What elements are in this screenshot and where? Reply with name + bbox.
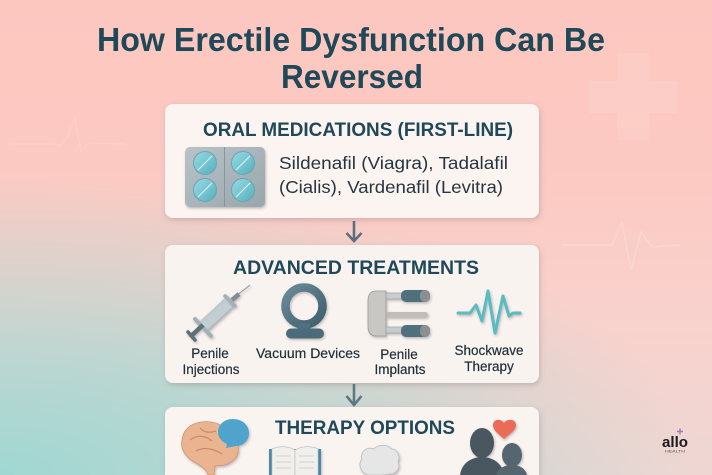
heading: oral medications: ORAL MEDICATIONS (FIRST-LINE) xyxy=(203,120,513,141)
icon: shockwave xyxy=(458,291,520,333)
icon: blister pack xyxy=(185,147,265,207)
arrow: oral medications to advanced treatments xyxy=(346,221,362,241)
label: shockwave therapy: Shockwave xyxy=(454,343,524,358)
heading: advanced treatments: ADVANCED TREATMENTS xyxy=(233,258,479,279)
background decoration: heartbeat line right xyxy=(562,223,680,270)
title: How Erectile Dysfunction Can Be xyxy=(97,21,605,58)
arrow: advanced treatments to therapy options xyxy=(346,384,362,405)
label: penile injections: Injections xyxy=(182,362,240,377)
heading: therapy options: THERAPY OPTIONS xyxy=(275,418,455,439)
logo: allo health: allo xyxy=(662,434,688,451)
label: shockwave therapy: Therapy xyxy=(464,359,514,374)
background decoration: heartbeat line left xyxy=(10,118,125,152)
text: medication names: Sildenafil (Viagra), Tadalafil xyxy=(279,153,508,173)
label: penile implants xyxy=(374,347,426,377)
label: penile injections: Penile xyxy=(191,346,229,361)
icon: syringe xyxy=(188,285,250,340)
icon: brain with speech bubble xyxy=(182,419,249,475)
icon: vacuum device ring xyxy=(286,288,324,338)
logo: allo health: HEALTH xyxy=(665,448,685,454)
panel: advanced treatments xyxy=(165,245,539,383)
label: vacuum devices: Vacuum Devices xyxy=(256,346,360,361)
icon: couple with heart xyxy=(460,420,527,475)
icon: penile implant xyxy=(368,290,430,337)
logo: allo health xyxy=(662,428,688,454)
panel: therapy options xyxy=(165,407,539,475)
icon: open book xyxy=(269,447,321,475)
label: shockwave therapy xyxy=(454,343,524,374)
text: medication names: (Cialis), Vardenafil (Levitra) xyxy=(279,177,503,197)
label: penile implants: Penile xyxy=(380,347,418,362)
text: medication names xyxy=(279,153,508,197)
background decoration: medical cross xyxy=(589,53,677,140)
icon: thought cloud xyxy=(360,445,399,475)
label: penile implants: Implants xyxy=(374,362,426,377)
title: Reversed xyxy=(281,58,423,95)
label: penile injections xyxy=(182,346,240,377)
title xyxy=(97,21,605,95)
panel: oral medications xyxy=(165,104,539,218)
